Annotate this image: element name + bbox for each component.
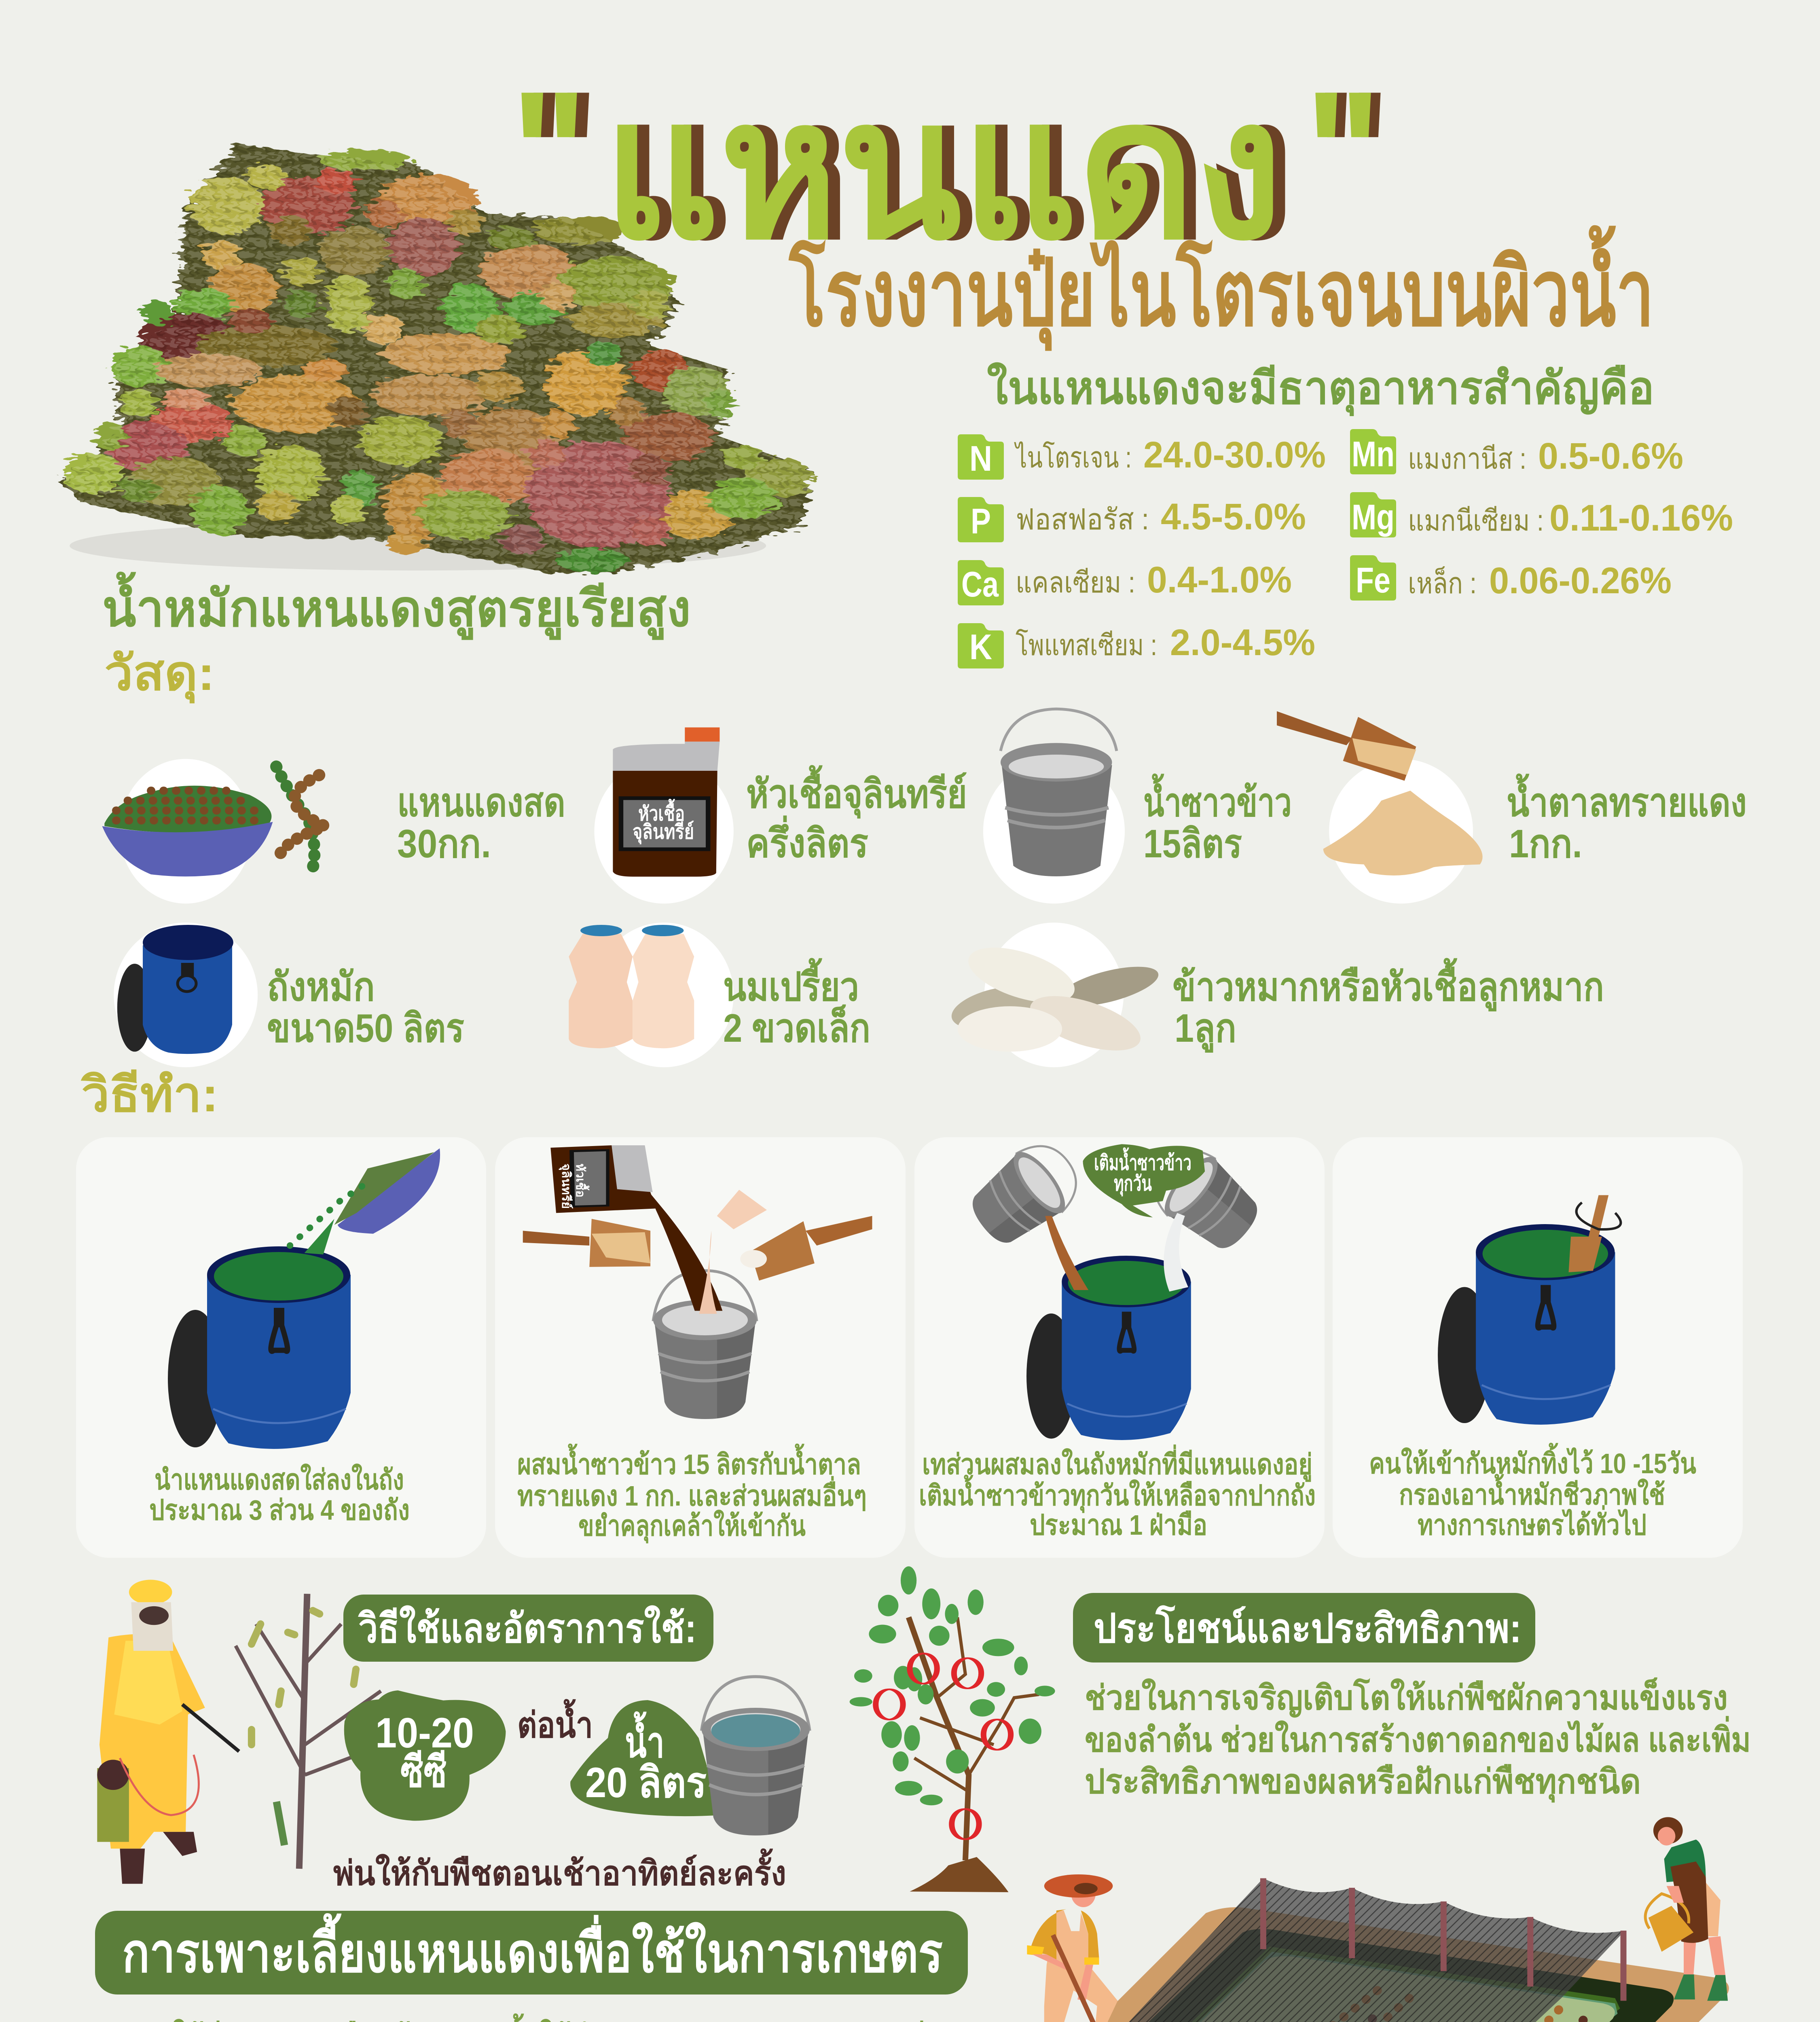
step 3 bubble text: เติมน้ำซาวข้าว: [1094, 1147, 1191, 1175]
label: yogurt: นมเปรี้ยว: [723, 958, 859, 1009]
heading: method: วิธีทำ:: [80, 1068, 218, 1122]
icon: water bucket: [702, 1677, 810, 1836]
nutrient: P: P: [971, 501, 991, 541]
step 4 paddle and rotation arrow: [1568, 1195, 1621, 1272]
step 3 text: [919, 1444, 1316, 1541]
nutrients heading: ในแหนแดงจะมีธาตุอาหารสำคัญคือ: [987, 362, 1654, 417]
blob: water 20 litres: [570, 1700, 722, 1816]
blob: dosage 10-20 cc: 10-20: [375, 1709, 474, 1757]
label: rice water: 15ลิตร: [1143, 821, 1242, 866]
icon: microbe bottle: [613, 728, 720, 877]
label: rice water: น้ำซาวข้าว: [1143, 773, 1292, 825]
icon: bowl of azolla: [102, 767, 325, 876]
nutrient: Mn: Mn: [1352, 434, 1395, 474]
nutrient: Fe: เหล็ก :: [1408, 566, 1477, 600]
label: rice cake starter: 1ลูก: [1175, 1006, 1236, 1053]
label: microbe starter: [746, 765, 967, 865]
label: rice water: [1143, 773, 1292, 866]
step 1 tilted bowl: [290, 1148, 440, 1254]
step 4 text: คนให้เข้ากันหมักทิ้งไว้ 10 -15วัน: [1369, 1442, 1696, 1479]
heading pill: benefits: ประโยชน์และประสิทธิภาพ:: [1094, 1605, 1522, 1651]
note: spray schedule: พ่นให้กับพืชตอนเช้าอาทิตย์ละครั้ง: [333, 1848, 786, 1892]
nutrient: Fe: 0.06-0.26%: [1489, 560, 1672, 601]
blob: dosage 10-20 cc: ซีซี: [400, 1749, 447, 1796]
label: barrel: [267, 964, 464, 1050]
step 3 bubble text: ทุกวัน: [1114, 1172, 1152, 1197]
label: barrel: ขนาด50 ลิตร: [267, 1006, 464, 1050]
label: rice cake starter: [1172, 958, 1604, 1053]
step 2 text: ทรายแดง 1 กก. และส่วนผสมอื่นๆ: [517, 1476, 867, 1512]
step 1 text: [149, 1463, 410, 1526]
step 3 streams and speech bubble: [1045, 1144, 1205, 1292]
step 1 text: ประมาณ 3 ส่วน 4 ของถัง: [149, 1494, 410, 1526]
icon backdrops: [114, 759, 1473, 1067]
benefits text: ประสิทธิภาพของผลหรือฝักแก่พืชทุกชนิด: [1085, 1762, 1641, 1803]
label: microbe starter: ครึ่งลิตร: [746, 815, 868, 865]
step 4 text: ทางการเกษตรได้ทั่วไป: [1418, 1505, 1646, 1541]
nutrient: Mg: 0.11-0.16%: [1549, 497, 1733, 539]
title: ": [1305, 55, 1382, 253]
step 2 rotated bottle label: [559, 1163, 590, 1209]
step 3 pouring buckets: [960, 1132, 1270, 1261]
step 2 bucket: [653, 1271, 757, 1419]
nutrient: P: ฟอสฟอรัส :: [1016, 503, 1149, 536]
step 4 barrel: [1438, 1224, 1615, 1425]
blob: dosage 10-20 cc: [344, 1690, 506, 1821]
blob: water 20 litres: น้ำ: [625, 1711, 665, 1766]
step 3 text: เติมน้ำซาวข้าวทุกวันให้เหลือจากปากถัง: [919, 1474, 1316, 1513]
label: rice cake starter: ข้าวหมากหรือหัวเชื้อลูกหมาก: [1172, 958, 1604, 1012]
title: ": [1314, 55, 1391, 253]
panel: step 2: [495, 1137, 906, 1558]
icon: fermenting barrel: [117, 925, 233, 1054]
nutrient: P: [958, 496, 1306, 542]
step 2 rotated bottle label: จุลินทรีย์: [559, 1163, 573, 1209]
photo: azolla cluster: [58, 144, 813, 573]
nutrient: Mn: 0.5-0.6%: [1538, 436, 1683, 477]
step 2 text: ผสมน้ำซาวข้าว 15 ลิตรกับน้ำตาล: [517, 1443, 861, 1480]
heading: materials: วัสดุ:: [104, 646, 215, 704]
illustration: sprayer worker: [97, 1580, 239, 1884]
nutrient: K: โพแทสเซียม :: [1016, 628, 1157, 662]
label: fresh azolla: [397, 780, 565, 866]
nutrient: Fe: [1350, 555, 1672, 601]
title: แหนแดง: [616, 61, 1295, 278]
panel: step 1: [76, 1137, 486, 1558]
heading: fertilizer recipe: น้ำหมักแหนแดงสูตรยูเรียสูง: [102, 571, 691, 640]
step 2 text: [517, 1443, 867, 1544]
step 4 text: [1369, 1442, 1696, 1541]
step 2 text: ขยำคลุกเคล้าให้เข้ากัน: [578, 1509, 806, 1544]
label: yogurt: [723, 958, 870, 1050]
panel: step 4: [1333, 1137, 1743, 1558]
nutrient: P: 4.5-5.0%: [1161, 496, 1306, 537]
nutrient: Ca: แคลเซียม :: [1016, 567, 1135, 599]
label: brown sugar: น้ำตาลทรายแดง: [1507, 773, 1747, 825]
step 3 barrel: [1026, 1256, 1191, 1440]
title: แหนแดง: [603, 61, 1283, 278]
nutrient: Ca: [958, 559, 1292, 605]
label: barrel: ถังหมัก: [267, 964, 375, 1009]
heading pill: benefits: [1073, 1593, 1535, 1662]
heading pill: cultivating azolla: การเพาะเลี้ยงแหนแดงเพื่อใช้ในการเกษตร: [122, 1913, 943, 1984]
nutrient: Mg: แมกนีเซียม :: [1408, 505, 1544, 537]
heading pill: usage: [343, 1595, 713, 1662]
nutrient: Ca: Ca: [961, 564, 999, 604]
illustration: leafy tree: [850, 1566, 1055, 1892]
nutrient: Mg: [1350, 492, 1733, 539]
benefits text: [1085, 1677, 1751, 1803]
heading pill: cultivating azolla: [95, 1911, 968, 1995]
nutrient: Fe: Fe: [1356, 560, 1390, 600]
label: per water: ต่อน้ำ: [517, 1699, 593, 1745]
step 3 text: เทส่วนผสมลงในถังหมักที่มีแหนแดงอยู่: [922, 1444, 1312, 1482]
label: fresh azolla: 30กก.: [397, 821, 491, 866]
nutrient: Ca: 0.4-1.0%: [1147, 559, 1292, 601]
title: ": [511, 55, 588, 253]
illustration: bare tree: [236, 1594, 381, 1869]
material icons: [102, 709, 1483, 1067]
step 3 bubble text: [1094, 1147, 1191, 1197]
nutrient: K: [958, 622, 1315, 668]
nutrient: N: N: [969, 438, 992, 478]
step 2 rotated bottle label: หัวเชื้อ: [574, 1163, 590, 1197]
bottle label text: [633, 799, 694, 844]
heading pill: usage: วิธีใช้และอัตราการใช้:: [358, 1605, 696, 1651]
step 1 text: นำแหนแดงสดใส่ลงในถัง: [154, 1463, 404, 1495]
illustration: farmer with hoe: [1027, 1874, 1118, 2022]
nutrient: K: 2.0-4.5%: [1170, 622, 1315, 663]
nutrient: Mn: [1350, 429, 1683, 477]
title: ": [523, 55, 600, 253]
label: yogurt: 2 ขวดเล็ก: [723, 1004, 870, 1050]
benefits text: ช่วยในการเจริญเติบโตให้แก่พืชผักความแข็งแรง: [1085, 1677, 1728, 1718]
nutrient: N: ไนโตรเจน :: [1014, 441, 1132, 474]
bottle label text: จุลินทรีย์: [633, 821, 694, 844]
icon: rice water bucket: [1001, 709, 1117, 876]
icon: brown sugar scoop: [1277, 711, 1483, 876]
step 3 text: ประมาณ 1 ฝ่ามือ: [1030, 1509, 1207, 1541]
icon: yogurt bottles: [569, 925, 694, 1048]
nutrient: Mg: Mg: [1352, 497, 1395, 537]
icon: rice cake starter: [934, 945, 1179, 1053]
bottle label text: หัวเชื้อ: [638, 799, 685, 825]
nutrient: N: [958, 434, 1326, 480]
illustration: netted azolla pond: [1019, 1878, 1729, 2022]
blob: water 20 litres: 20 ลิตร: [585, 1759, 707, 1806]
nutrient: Mn: แมงกานีส :: [1408, 443, 1526, 475]
step 4 text: กรองเอาน้ำหมักชีวภาพใช้: [1399, 1474, 1665, 1510]
label: fresh azolla: แหนแดงสด: [397, 780, 565, 825]
step 2 pouring ingredients: [523, 1145, 872, 1314]
label: brown sugar: [1507, 773, 1747, 866]
nutrient: N: 24.0-30.0%: [1143, 434, 1326, 476]
panel: step 3: [914, 1132, 1325, 1558]
step 1 barrel: [168, 1246, 351, 1449]
nutrient: K: K: [969, 627, 992, 667]
illustration: farmer with watering can: [1645, 1817, 1728, 2001]
label: brown sugar: 1กก.: [1509, 821, 1582, 866]
label: microbe starter: หัวเชื้อจุลินทรีย์: [746, 765, 967, 819]
